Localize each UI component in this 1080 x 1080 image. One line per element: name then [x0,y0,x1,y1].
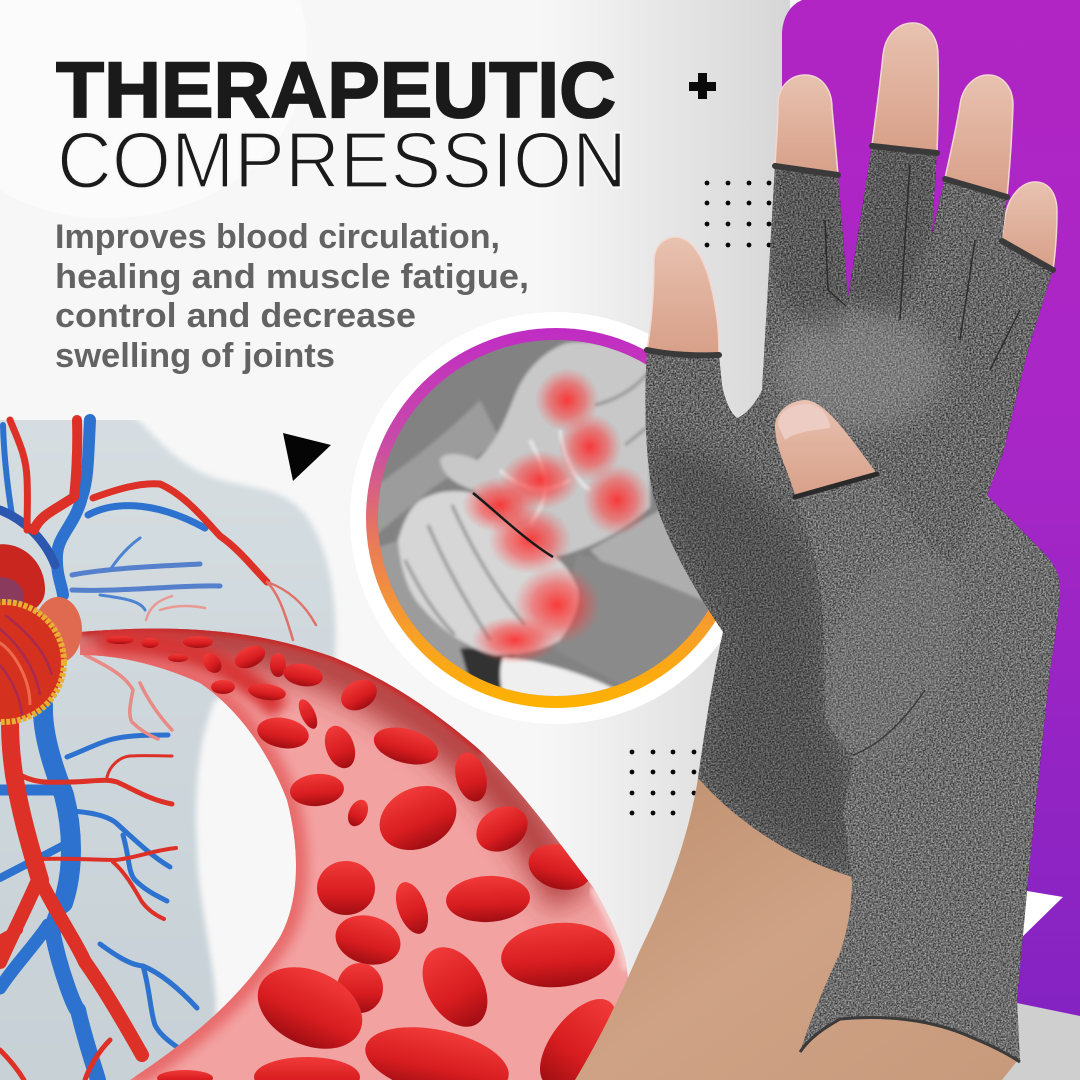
blood cells [106,636,631,1080]
inset circle: sore hands [366,312,735,724]
thumb nail [778,404,830,440]
sheet [497,655,614,696]
shadow [459,646,514,688]
subtitle text block [55,218,529,375]
arteries blue [0,420,220,1080]
lower left arm [380,540,469,673]
icon: triangle [283,433,331,481]
inflamed joints [537,370,597,430]
subtitle text block: control and decrease [55,297,416,335]
lower hand [398,491,579,655]
icon: plus [689,73,716,99]
finger lines [405,370,650,640]
purple panel [782,0,1080,1016]
dot grid lower [630,750,696,815]
pale background blob [0,0,307,218]
glove: rear [645,145,1053,878]
dot grid upper [705,181,771,247]
glove: rear cuffs [647,146,1053,355]
title [56,45,627,204]
veins [500,430,590,525]
blood vessel [80,629,640,1080]
glove: rear shading [646,145,945,878]
arteries red [0,420,316,1080]
photo background [378,340,621,688]
hand: rear fingers skin [647,23,1057,355]
title: THERAPEUTIC [56,45,616,134]
panel: circulatory system [0,400,640,1080]
hand: front thumb skin [775,400,878,498]
glove: front [795,474,1060,1062]
subtitle text block: healing and muscle fatigue, [55,258,529,296]
subtitle text block: Improves blood circulation, [55,218,500,256]
vascular backdrop [0,400,336,1080]
upper hand [440,342,650,557]
heart [0,544,82,722]
hand: arm skin [575,778,1018,1080]
crease [473,493,553,557]
white triangle [1015,889,1063,944]
bottom right corner [900,960,1080,1080]
glove: finger seams [825,165,1020,370]
vessel inner shading [80,637,570,900]
background shading [540,0,790,1080]
glove: front thumb mound [825,554,960,759]
glove: mound seam [853,690,925,755]
glove: bottom hem [800,1017,1020,1062]
title: COMPRESSION [57,116,627,204]
subtitle text block: swelling of joints [55,337,335,375]
forearm [603,562,708,643]
glove: front cuffs [795,474,877,497]
